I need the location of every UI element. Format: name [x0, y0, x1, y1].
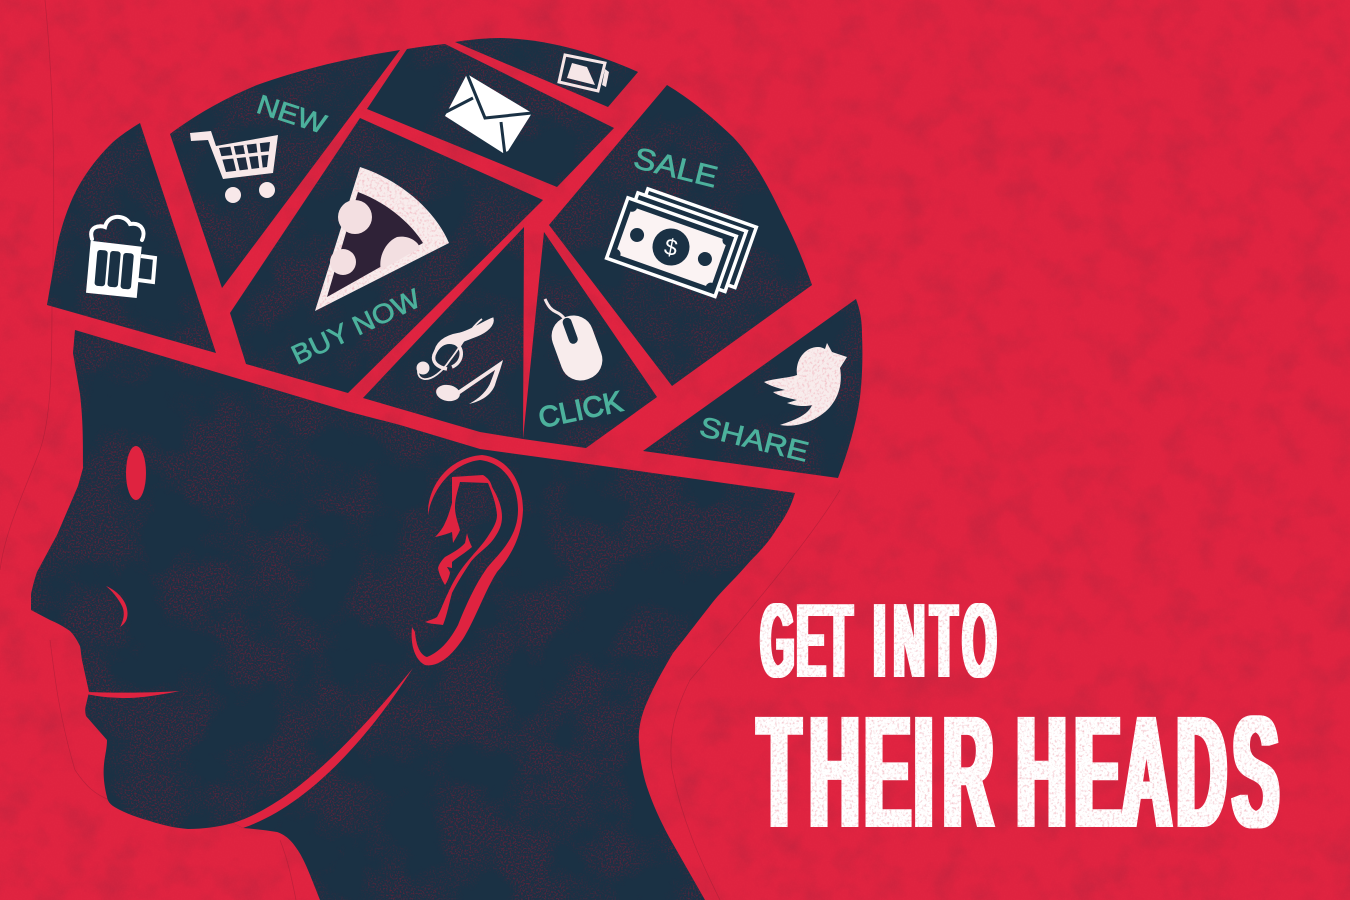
jaw line: [233, 668, 413, 828]
brain segment: click: [523, 232, 657, 448]
head and neck shape: [31, 330, 795, 900]
nose line: [106, 586, 128, 627]
brain segment: sale: [549, 85, 812, 386]
label: NEW: NEW: [253, 89, 330, 140]
icon: beer mug: [86, 217, 155, 298]
brain segment: share: [643, 299, 862, 478]
icon: computer mouse: [545, 299, 608, 386]
brain segment: email: [367, 44, 614, 187]
mouth: [86, 691, 180, 698]
title line: GET INTO: GET INTO: [761, 583, 996, 701]
ear inner fold: [425, 475, 502, 625]
ear: [412, 455, 523, 665]
brain segment: music: [363, 227, 524, 439]
head silhouette: [31, 38, 862, 900]
brain segment: beer: [47, 123, 216, 353]
label: CLICK: CLICK: [536, 386, 626, 435]
icon: pizza slice: [315, 167, 449, 311]
brain segment: cart: [170, 50, 400, 288]
brain segment: pizza: [230, 118, 543, 393]
icon: low battery: [559, 55, 609, 91]
icon: stack of money: [607, 189, 756, 297]
brain segment: battery: [455, 38, 638, 107]
icon: shopping cart: [190, 131, 278, 203]
label: BUY NOW: BUY NOW: [287, 283, 425, 370]
title line: THEIR HEADS: THEIR HEADS: [758, 683, 1279, 862]
ear outer rim: [412, 455, 523, 665]
eye: [126, 446, 146, 500]
icon: envelope: [444, 74, 532, 155]
title: [758, 583, 1279, 862]
brain labels: [253, 89, 812, 468]
face features: [86, 446, 413, 828]
icon: music notes: [416, 318, 503, 404]
icon: stack of money: $: [662, 233, 680, 261]
label: SHARE: SHARE: [697, 411, 812, 468]
ear small fold: [438, 533, 472, 585]
label: SALE: SALE: [630, 142, 721, 194]
icon: twitter bird: [764, 343, 847, 426]
